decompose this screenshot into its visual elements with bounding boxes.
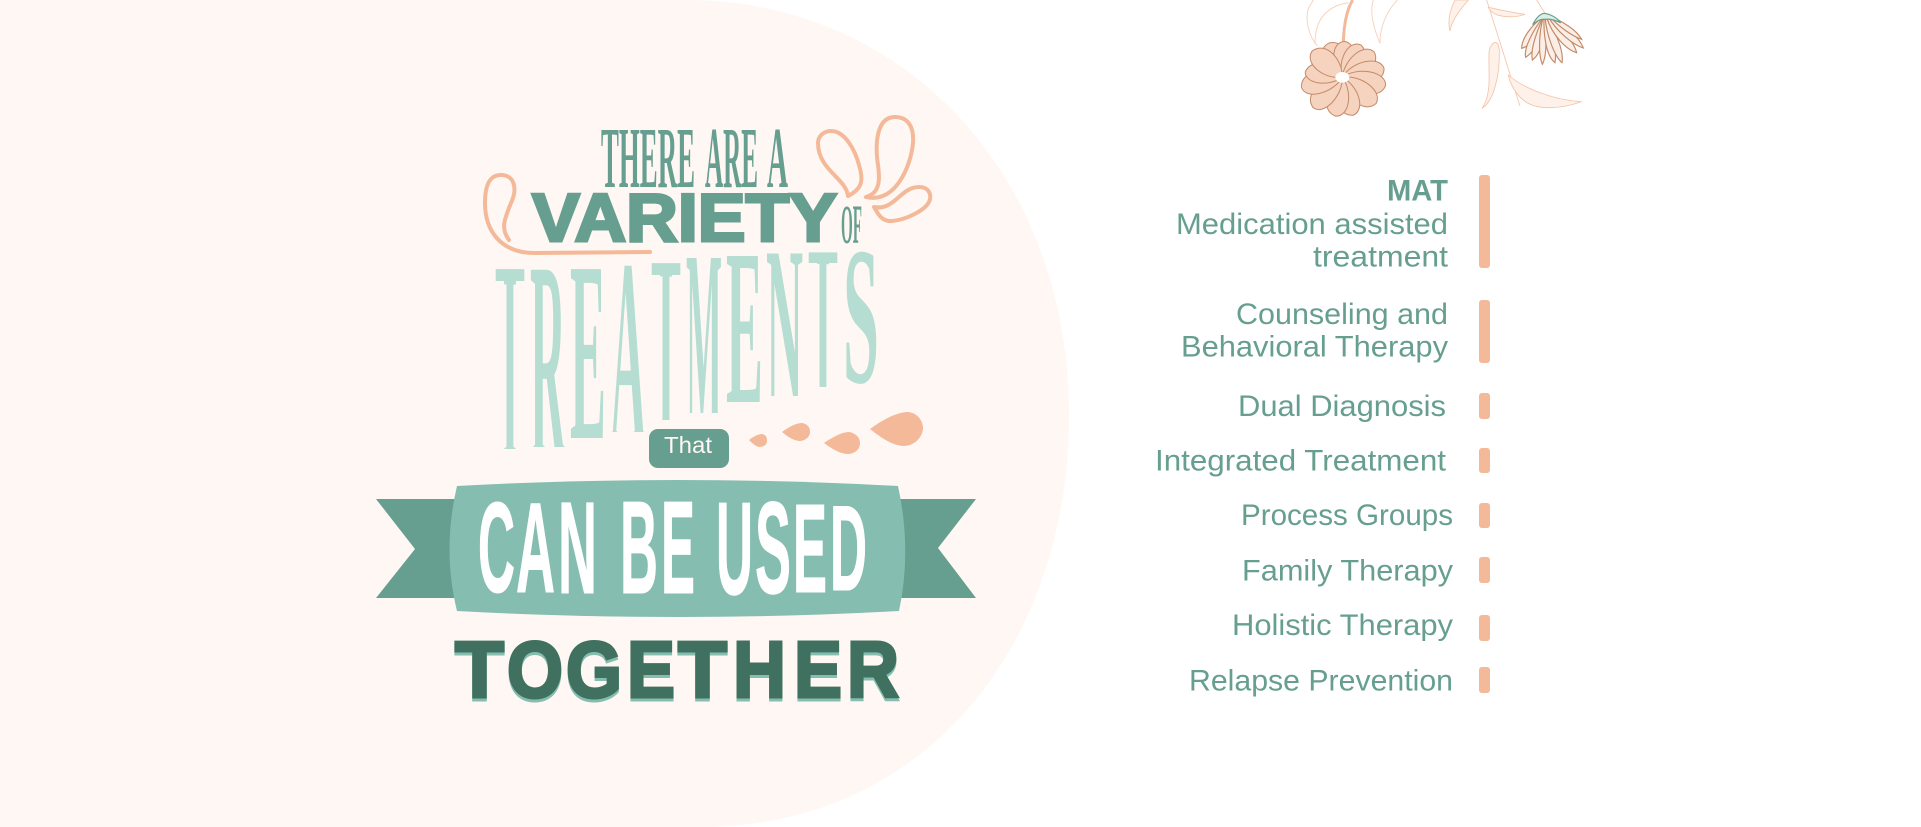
- heading: treatments: N: [766, 199, 803, 460]
- icon: right leaves and stem: [1449, 0, 1582, 108]
- together letters: T: [455, 625, 504, 714]
- illustration: flowers: [1299, 0, 1583, 118]
- item: relapse prevention: Relapse Prevention: [1189, 665, 1453, 698]
- banner text: can be used: U: [716, 475, 753, 622]
- together letters: O: [507, 625, 563, 714]
- banner centre: [450, 480, 905, 617]
- text: T: [808, 200, 838, 448]
- together letters: E: [794, 625, 842, 714]
- label pill: that: [649, 429, 729, 468]
- together letters: T: [678, 625, 727, 714]
- together shadow: O: [507, 628, 563, 717]
- item: counseling: Counseling and: [1236, 298, 1448, 331]
- item: dual diagnosis: Dual Diagnosis: [1238, 390, 1446, 423]
- heading: treatments: [496, 252, 876, 449]
- together shadow: R: [847, 628, 899, 717]
- item: process groups: Process Groups: [1241, 499, 1453, 532]
- icon: outline leaves: [1307, 0, 1397, 46]
- together letters: E: [627, 625, 675, 714]
- heading: together: [455, 625, 899, 717]
- icon: large flower: [1299, 39, 1388, 118]
- heading: treatments: M: [686, 199, 722, 481]
- text: S: [843, 206, 879, 425]
- together shadow: E: [794, 628, 842, 717]
- title lettering: A: [767, 109, 788, 206]
- banner text: can be used: E: [793, 478, 827, 619]
- banner text: can be used: A: [516, 477, 555, 620]
- heading: treatments: A: [610, 204, 646, 503]
- banner text: can be used: N: [558, 474, 597, 621]
- together letters: [455, 625, 899, 714]
- banner: [376, 474, 976, 622]
- item: integrated treatment: Integrated Treatment: [1155, 445, 1447, 478]
- icon: drops: [749, 412, 923, 454]
- together letters: G: [566, 625, 622, 714]
- together shadow: E: [627, 628, 675, 717]
- together letters: R: [847, 625, 899, 714]
- together letters: H: [733, 625, 786, 714]
- item: MAT: treatment: [1313, 241, 1449, 274]
- title lettering: [496, 130, 876, 468]
- item: holistic therapy: Holistic Therapy: [1232, 609, 1453, 642]
- icon: right curls: [818, 117, 930, 221]
- banner text: can be used: E: [661, 474, 695, 621]
- heading: treatments: T: [651, 202, 681, 488]
- together shadow: G: [566, 628, 622, 717]
- banner text: can be used: S: [755, 474, 791, 621]
- banner tails: [376, 499, 976, 598]
- together shadow: H: [733, 628, 786, 717]
- item: MAT: Medication assisted: [1176, 208, 1448, 241]
- icon: small flower: [1522, 13, 1583, 64]
- text: OF: [841, 194, 862, 255]
- banner text: can be used: C: [478, 477, 515, 620]
- together shadow: T: [678, 628, 727, 717]
- heading: there are a: [601, 109, 788, 206]
- icon: flower stem: [1343, 0, 1353, 42]
- list: treatment types: [1155, 175, 1490, 698]
- item: counseling: [1181, 298, 1490, 364]
- banner text: can be used: [478, 474, 867, 622]
- item: family therapy: Family Therapy: [1242, 555, 1453, 588]
- banner text: can be used: B: [620, 474, 658, 621]
- banner: D: [830, 480, 867, 616]
- item: MAT: [1176, 175, 1490, 274]
- title lettering: ARE: [705, 109, 758, 206]
- icon: left curl: [485, 175, 650, 253]
- item: counseling: Behavioral Therapy: [1181, 331, 1448, 364]
- heading: there are a: THERE: [601, 109, 695, 206]
- heading: treatments: E: [726, 204, 763, 451]
- together shadow: T: [455, 628, 504, 717]
- panel: background blob: [0, 0, 1069, 827]
- label pill: that: That: [664, 432, 713, 458]
- heading: treatments: T: [495, 201, 525, 525]
- heading: treatments: R: [530, 201, 567, 522]
- heading: variety: VARIETY: [532, 180, 837, 256]
- together shadow: [455, 628, 899, 717]
- heading: treatments: E: [570, 208, 606, 494]
- item: MAT: MAT: [1387, 175, 1448, 208]
